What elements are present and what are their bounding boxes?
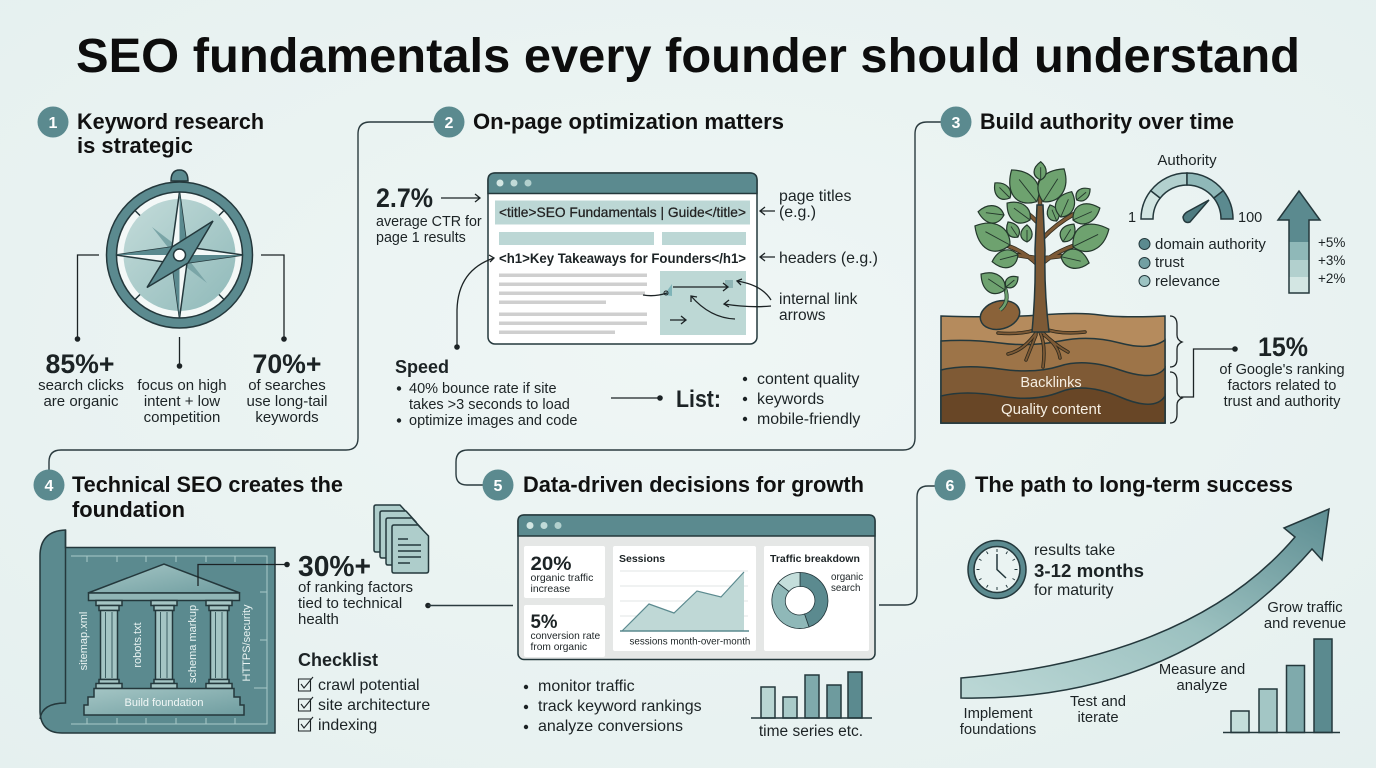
illustration: soil layers: Backlinks (1020, 375, 1082, 391)
milestone labels: analyze (1176, 678, 1228, 694)
heading: keyword research: Keyword research (77, 109, 264, 134)
text: focus: competition (144, 409, 220, 426)
card: 20%: increase (530, 583, 570, 595)
up arrow with increments: +5% (1318, 235, 1345, 250)
text: speed: Speed (395, 357, 449, 377)
callout line (198, 562, 290, 586)
dashboard browser (518, 515, 875, 660)
stat: 70%: use long-tail (247, 393, 327, 410)
text: speed: 40% bounce rate if site (409, 381, 557, 397)
illustration: blueprint with temple (40, 530, 275, 733)
annotation: internal link arrows: internal link (779, 291, 858, 308)
stat: 70% (247, 349, 327, 426)
panel: long-term success (934, 470, 1346, 738)
illustration: blueprint with temple: Build foundation (125, 697, 203, 709)
gauge: authority: Authority (1157, 152, 1217, 169)
text: speed: optimize images and code (409, 413, 577, 429)
heading: build authority: Build authority over time (980, 109, 1234, 134)
checklist: site architecture (318, 697, 430, 714)
stat: 15%: of Google's ranking (1219, 362, 1345, 378)
connector: section 4 to 5 (425, 603, 513, 608)
step badge 2 (434, 106, 464, 138)
chart: time series bars (751, 672, 872, 740)
milestone labels: Grow traffic (1267, 600, 1343, 616)
gauge: authority (1128, 152, 1262, 226)
illustration: soil layers (941, 314, 1165, 423)
stat: 30%: health (298, 611, 339, 628)
milestone labels: Implement (963, 706, 1033, 722)
list: content quality (757, 371, 860, 388)
list: keywords (757, 391, 824, 408)
braces and connector (1170, 316, 1238, 423)
checklist: indexing (318, 717, 377, 734)
panel: build authority (940, 106, 1345, 423)
bullet list: monitoring (524, 678, 702, 735)
heading: data-driven: Data-driven decisions for growth (523, 472, 864, 497)
list: List: (676, 386, 721, 413)
annotation: internal link arrows (691, 279, 858, 324)
stat: 15%: trust and authority (1224, 394, 1341, 410)
text: focus: focus on high (137, 377, 227, 394)
panel: data-driven decisions (482, 470, 875, 740)
card: 20%: 20% (530, 554, 572, 575)
panel: on-page optimization (376, 106, 878, 429)
step badge 3 (940, 106, 972, 138)
card: 5%: from organic (530, 642, 587, 653)
milestone labels: foundations (960, 722, 1036, 738)
annotation: page titles: page titles (779, 188, 851, 205)
legend: trust (1155, 254, 1185, 271)
step badge 1 (38, 106, 68, 138)
milestone labels: Test and (1070, 694, 1126, 710)
step badge 5 (482, 470, 514, 500)
gauge: authority: 100 (1238, 210, 1262, 226)
icon: compass (106, 170, 252, 328)
text: 3-12 months: for maturity (1034, 582, 1114, 599)
card: sessions chart: Sessions (619, 553, 665, 565)
stat: 2.7%: page 1 results (376, 230, 466, 246)
step badge 4: 4 (45, 478, 54, 495)
stat: 70%: 70%+ (252, 349, 322, 379)
text: speed: takes >3 seconds to load (409, 397, 570, 413)
milestone labels: and revenue (1264, 616, 1346, 632)
stat: 70%: keywords (255, 409, 319, 426)
illustration: blueprint with temple: HTTPS/security (241, 604, 253, 682)
stat: 2.7%: average CTR for (376, 214, 482, 230)
browser mockup: <title>SEO Fundamentals | Guide</title> (499, 204, 746, 220)
annotation: headers: headers (e.g.) (779, 250, 878, 267)
text: 3-12 months: results take (1034, 542, 1115, 559)
text: speed (395, 357, 577, 429)
connector: section 1 to 2 and 4 (49, 122, 436, 470)
panel: technical SEO (34, 470, 430, 734)
up arrow with increments: +3% (1318, 253, 1345, 268)
stat: 2.7%: 2.7% (376, 183, 433, 213)
text: focus: intent + low (144, 393, 220, 410)
illustration: blueprint with temple: sitemap.xml (78, 612, 90, 670)
text: 3-12 months: 3-12 months (1034, 561, 1144, 581)
step badge 3: 3 (952, 115, 961, 132)
annotation: page titles: (e.g.) (779, 204, 816, 221)
icon: documents (374, 505, 428, 573)
checklist: Checklist (298, 650, 378, 670)
heading: long-term success: The path to long-term success (975, 472, 1293, 497)
card: 20% (524, 546, 605, 598)
illustration: blueprint with temple: schema markup (187, 605, 199, 683)
stat: 2.7% (376, 183, 482, 246)
checklist (298, 650, 430, 734)
up arrow with increments (1278, 191, 1345, 293)
stat: 15%: factors related to (1228, 378, 1336, 394)
callout lines (75, 255, 287, 369)
stat: 30% (298, 551, 413, 628)
card: traffic breakdown donut: Traffic breakdown (770, 553, 860, 565)
card: traffic breakdown donut (764, 546, 869, 651)
panel: keyword research (38, 106, 327, 426)
stat: 15%: 15% (1258, 332, 1308, 362)
legend (1139, 236, 1266, 290)
heading: on-page: On-page optimization matters (473, 109, 784, 134)
stat: 30%: of ranking factors (298, 579, 413, 596)
card: 20%: organic traffic (530, 572, 593, 584)
heading: technical SEO: Technical SEO creates the (72, 472, 343, 497)
milestone labels (960, 600, 1346, 738)
stat: 85%: are organic (43, 393, 119, 410)
bullet list: monitoring: track keyword rankings (538, 698, 702, 715)
heading: keyword research: is strategic (77, 133, 193, 158)
browser mockup (488, 173, 757, 344)
stat: 70%: of searches (248, 377, 326, 394)
stat: 15% (1219, 332, 1345, 410)
step badge 6 (934, 470, 966, 500)
card: 5%: conversion rate (530, 631, 600, 642)
illustration: soil layers: Quality content (1001, 401, 1102, 418)
list (611, 371, 860, 428)
legend: domain authority (1155, 236, 1266, 253)
stat: 30%: tied to technical (298, 595, 402, 612)
connector: section 3 to 5 (456, 122, 943, 485)
up arrow with increments: +2% (1318, 271, 1345, 286)
browser mockup: <h1>Key Takeaways for Founders</h1> (499, 250, 746, 266)
illustration: tree with seedling (968, 161, 1114, 367)
title: SEO fundamentals every founder should understand (76, 30, 1300, 83)
annotation: internal link arrows: arrows (779, 307, 826, 324)
bullet list: monitoring: monitor traffic (538, 678, 635, 695)
step badge 4 (34, 470, 64, 500)
callout: speed line (454, 255, 494, 350)
illustration: blueprint with temple: robots.txt (132, 622, 144, 668)
card: traffic breakdown donut: search (831, 583, 860, 594)
card: traffic breakdown donut: organic (831, 572, 863, 583)
chart: growth bars (1223, 639, 1340, 732)
growth arrow (961, 509, 1329, 698)
stat: 85%: 85%+ (46, 349, 114, 379)
card: 5%: 5% (530, 612, 558, 633)
icon: clock (968, 540, 1026, 598)
step badge 2: 2 (445, 115, 454, 132)
milestone labels: iterate (1077, 710, 1119, 726)
card: sessions chart (613, 546, 756, 651)
heading: technical SEO: foundation (72, 497, 185, 522)
card: sessions chart: sessions month-over-month (630, 636, 750, 648)
card: 5% (524, 605, 605, 657)
step badge 6: 6 (946, 478, 955, 495)
connector: section 5 to 6 (879, 486, 937, 605)
list: mobile-friendly (757, 411, 860, 428)
step badge 5: 5 (494, 478, 503, 495)
legend: relevance (1155, 273, 1220, 290)
bullet list: monitoring: analyze conversions (538, 718, 683, 735)
checklist: crawl potential (318, 677, 420, 694)
stat: 30%: 30%+ (298, 551, 371, 583)
gauge: authority: 1 (1128, 210, 1136, 226)
step badge 1: 1 (49, 115, 58, 132)
text: 3-12 months (1034, 542, 1144, 599)
stat: 85% (38, 349, 124, 410)
milestone labels: Measure and (1159, 662, 1245, 678)
chart: time series bars: time series etc. (759, 723, 863, 740)
annotation: page titles (760, 188, 851, 221)
stat: 85%: search clicks (38, 377, 124, 394)
